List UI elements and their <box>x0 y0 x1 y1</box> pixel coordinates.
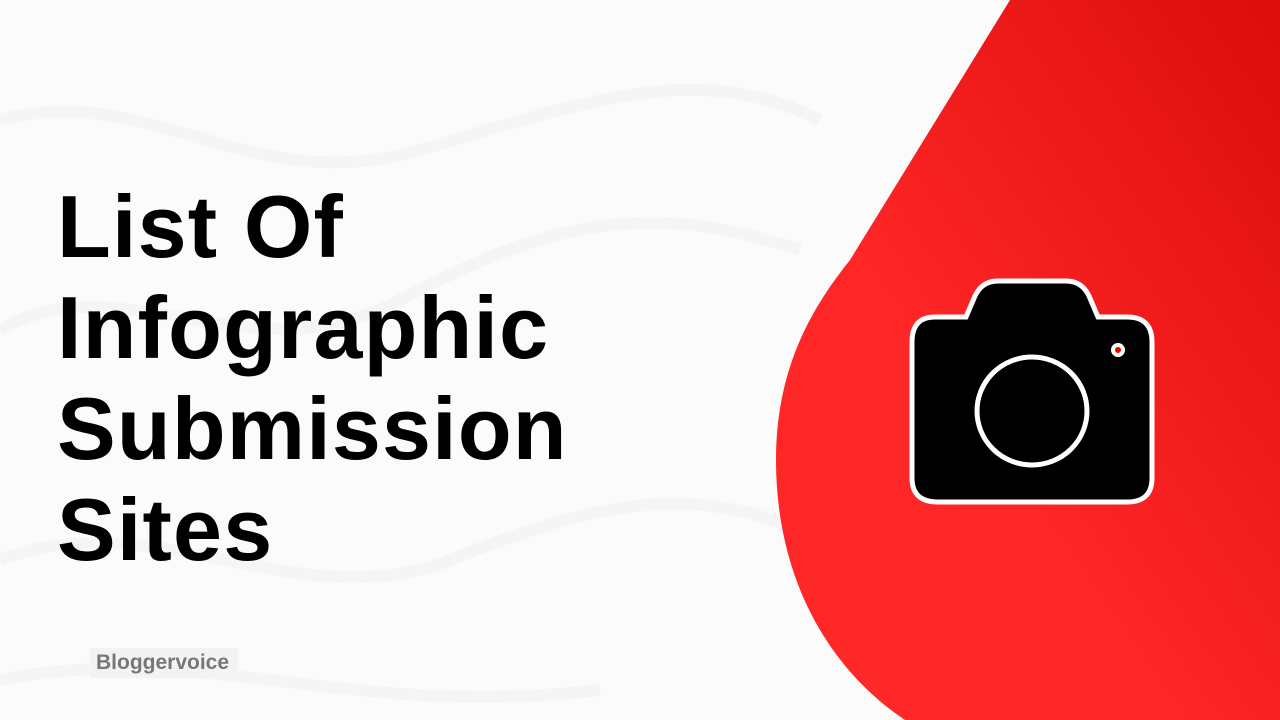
logo: Bloggervoice <box>90 648 238 678</box>
logo: Bloggervoice: Bloggervoice <box>96 651 229 674</box>
red shape <box>776 0 1280 720</box>
icon: camera <box>910 278 1154 504</box>
title: Sites <box>57 480 273 579</box>
title <box>57 177 568 579</box>
title: List Of <box>57 177 344 276</box>
title: Submission <box>57 379 568 478</box>
title: Infographic <box>57 278 549 377</box>
